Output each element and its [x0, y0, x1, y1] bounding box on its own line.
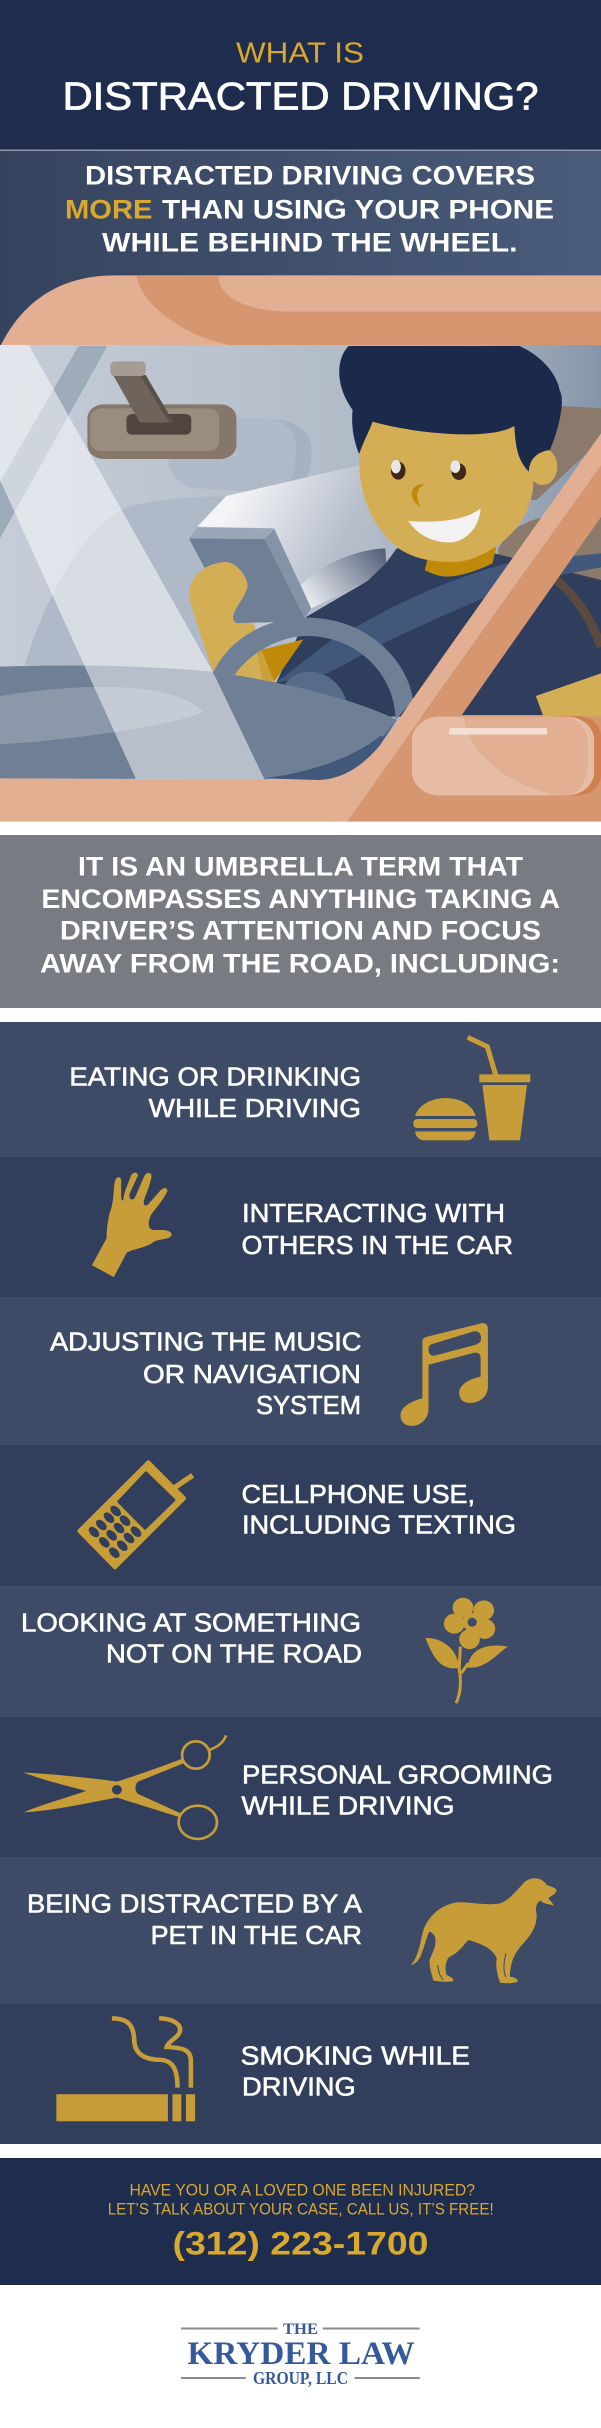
steering wheel	[213, 618, 413, 737]
logo: the kryder law group: THE	[283, 2321, 318, 2338]
heading: distracted driving: DISTRACTED DRIVING?	[62, 76, 538, 119]
illustration: driver looking at phone	[0, 345, 601, 822]
row text: LOOKING AT SOMETHING	[21, 1607, 361, 1637]
row: adjusting music	[0, 1297, 601, 1445]
row text: DRIVING	[242, 2072, 356, 2102]
umbrella text: IT IS AN UMBRELLA TERM THAT	[78, 852, 524, 882]
neck	[425, 547, 496, 577]
row text: CELLPHONE USE,	[242, 1479, 475, 1509]
row: eating or drinking	[0, 1022, 601, 1157]
head	[339, 346, 562, 562]
row: smoking	[0, 2004, 601, 2144]
driver hand at door	[536, 673, 601, 717]
cta text	[108, 2181, 494, 2218]
row text	[241, 2041, 470, 2102]
row text: PERSONAL GROOMING	[242, 1760, 553, 1790]
row text	[27, 1889, 363, 1950]
umbrella text: ENCOMPASSES ANYTHING TAKING A	[41, 884, 560, 914]
heading: what is: WHAT IS	[236, 38, 364, 70]
row: personal grooming	[0, 1717, 601, 1857]
row text: EATING OR DRINKING	[69, 1062, 361, 1092]
logo: the kryder law group: KRYDER LAW	[187, 2336, 415, 2372]
call to action footer	[0, 2158, 601, 2285]
row text: OTHERS IN THE CAR	[242, 1230, 513, 1260]
light beam	[0, 345, 264, 779]
header banner	[0, 0, 601, 150]
row text: WHILE DRIVING	[242, 1790, 454, 1820]
row: pet in car	[0, 1857, 601, 2004]
cta text: HAVE YOU OR A LOVED ONE BEEN INJURED?	[130, 2181, 475, 2200]
shirt	[276, 548, 601, 717]
row text	[242, 1479, 516, 1540]
intro text: MORE	[65, 194, 152, 224]
hair	[339, 346, 562, 472]
row: cellphone use	[0, 1445, 601, 1586]
row text	[50, 1327, 362, 1420]
nose	[412, 484, 425, 507]
dashboard	[0, 665, 397, 780]
hand and arm	[189, 562, 304, 683]
phone	[189, 527, 311, 631]
row text	[69, 1062, 361, 1123]
umbrella text: DRIVER’S ATTENTION AND FOCUS	[60, 916, 541, 946]
eyes	[391, 460, 466, 480]
row: looking at something	[0, 1586, 601, 1717]
logo: the kryder law group	[181, 2321, 420, 2388]
row text	[21, 1607, 362, 1668]
umbrella term panel	[0, 835, 601, 1008]
row text: WHILE DRIVING	[149, 1093, 361, 1123]
seat belt	[276, 553, 601, 683]
seat behind driver	[498, 405, 601, 673]
row text: PET IN THE CAR	[151, 1920, 362, 1950]
icon: hand	[92, 1173, 172, 1277]
intro text	[65, 160, 554, 258]
row text: OR NAVIGATION	[143, 1359, 361, 1389]
logo: the kryder law group: GROUP, LLC	[253, 2368, 348, 2388]
row text: SYSTEM	[256, 1390, 361, 1420]
cta text: LET’S TALK ABOUT YOUR CASE, CALL US, IT’S FREE!	[108, 2199, 494, 2218]
icon: music notes	[401, 1323, 488, 1426]
icon: flower	[425, 1598, 508, 1703]
door handle	[412, 716, 601, 795]
strip	[0, 346, 107, 538]
mirror reflection	[169, 417, 312, 493]
window pillar	[0, 433, 601, 822]
icon: cellphone	[79, 1462, 193, 1567]
passenger shoulder	[552, 577, 601, 647]
intro panel	[0, 150, 601, 350]
windshield	[0, 345, 601, 782]
rearview mirror	[87, 361, 236, 459]
icon: dog	[412, 1878, 557, 1983]
intro text: THAN USING YOUR PHONE	[162, 194, 554, 224]
row: interacting with others	[0, 1157, 601, 1297]
umbrella text	[40, 852, 560, 979]
row text: ADJUSTING THE MUSIC	[50, 1327, 362, 1357]
phone glow	[197, 465, 386, 608]
intro text: DISTRACTED DRIVING COVERS	[85, 160, 535, 190]
row text: SMOKING WHILE	[241, 2041, 470, 2071]
phone number: (312) 223-1700	[172, 2225, 428, 2261]
umbrella text: AWAY FROM THE ROAD, INCLUDING:	[40, 949, 560, 979]
icon: burger and drink	[413, 1037, 530, 1140]
intro text: WHILE BEHIND THE WHEEL.	[102, 228, 518, 258]
row text	[242, 1760, 553, 1820]
row text: BEING DISTRACTED BY A	[27, 1889, 363, 1919]
row text: INTERACTING WITH	[242, 1198, 505, 1228]
icon: cigarette	[56, 2018, 195, 2121]
interior seat arc	[25, 496, 307, 673]
row text: INCLUDING TEXTING	[242, 1510, 516, 1540]
icon: scissors	[23, 1735, 226, 1839]
smile	[408, 508, 481, 542]
row text	[242, 1198, 513, 1260]
car roof	[0, 275, 601, 347]
row text: NOT ON THE ROAD	[106, 1638, 362, 1668]
